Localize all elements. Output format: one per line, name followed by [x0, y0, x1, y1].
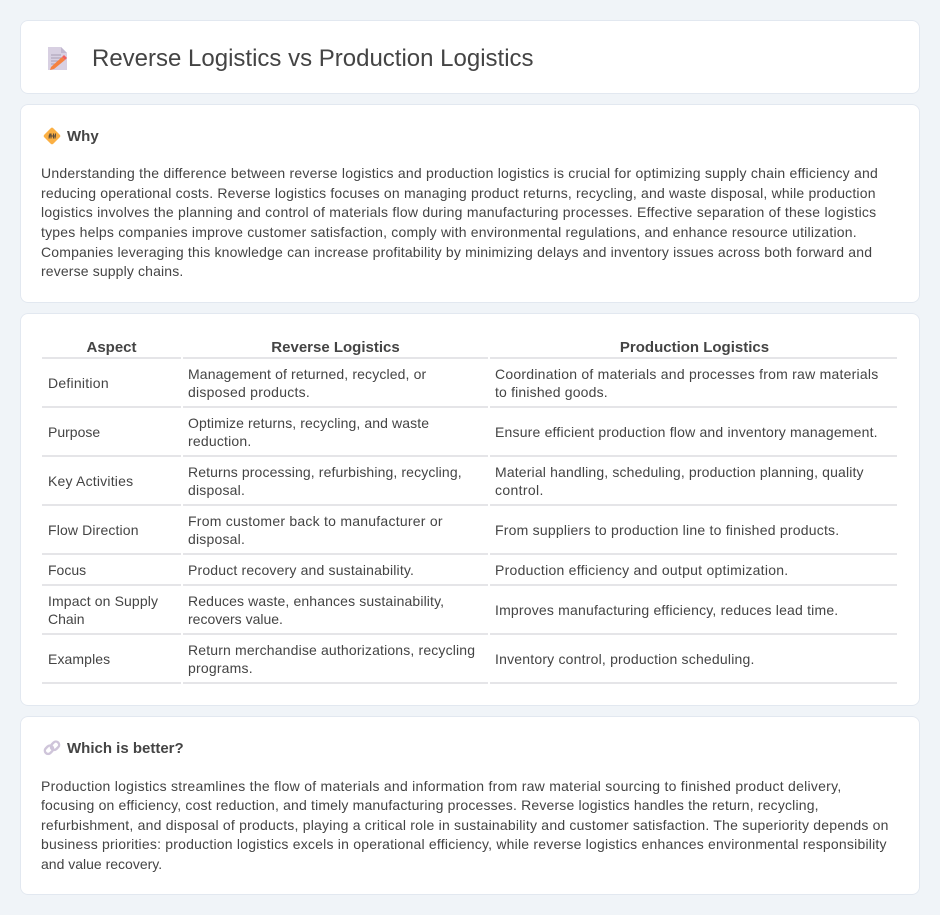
text block: why paragraph: Understanding the difference between reverse logistics and production logistics is crucial for optimizing supply chain efficiency and	[41, 165, 878, 181]
table rows: Impact on Supply	[48, 593, 158, 609]
text block: why paragraph: logistics involves the planning and control of materials flow during manufacturing processes. Effective separation of these logistics	[41, 204, 876, 220]
text block: why paragraph: types helps companies improve customer satisfaction, comply with environmental regulations, and enhance resource utilization.	[41, 224, 857, 240]
table rows: Flow Direction	[48, 522, 139, 538]
table rows: From suppliers to production line to finished products.	[495, 522, 839, 538]
table rows: Returns processing, refurbishing, recycling,	[188, 464, 462, 480]
table rows: recovers value.	[188, 611, 283, 627]
table rows: Purpose	[48, 424, 100, 440]
icon: chain link	[44, 740, 60, 756]
panel: comparison table	[20, 313, 920, 706]
panel: which is better	[20, 716, 920, 895]
text block: which is better paragraph: and value recovery.	[41, 856, 162, 872]
table rows: disposal.	[188, 531, 245, 547]
table rows: Examples	[48, 651, 110, 667]
title: Reverse Logistics vs Production Logistics	[92, 45, 534, 72]
table rows: programs.	[188, 660, 253, 676]
table rows: control.	[495, 482, 544, 498]
table rows: Product recovery and sustainability.	[188, 562, 414, 578]
panel: why	[20, 104, 920, 303]
table header	[86, 339, 769, 356]
table rows: Inventory control, production scheduling.	[495, 651, 755, 667]
text block: which is better paragraph: business priorities: production logistics excels in operational efficiency, while reverse logistics enhances environmental responsibility	[41, 836, 887, 852]
table rows: Key Activities	[48, 473, 133, 489]
table rows: Optimize returns, recycling, and waste	[188, 415, 429, 431]
table rows: reduction.	[188, 433, 251, 449]
table header: Production Logistics	[620, 339, 769, 356]
table rows: Ensure efficient production flow and inventory management.	[495, 424, 878, 440]
table rows: Reduces waste, enhances sustainability,	[188, 593, 444, 609]
table rows: Return merchandise authorizations, recycling	[188, 642, 475, 658]
table rows: Production efficiency and output optimization.	[495, 562, 788, 578]
text block: which is better paragraph	[41, 778, 889, 872]
table header: Aspect	[86, 339, 137, 356]
table rows: Chain	[48, 611, 85, 627]
panel: title header	[20, 20, 920, 94]
table rows: Improves manufacturing efficiency, reduces lead time.	[495, 602, 838, 618]
text block: which is better paragraph: focusing on efficiency, cost reduction, and timely manufacturing processes. Reverse logistics handles the return, recycling,	[41, 797, 819, 813]
table rows: disposal.	[188, 482, 245, 498]
table rows: Coordination of materials and processes from raw materials	[495, 366, 879, 382]
text block: why paragraph: reverse supply chains.	[41, 263, 183, 279]
table rows: to finished goods.	[495, 384, 608, 400]
text block: which is better paragraph: refurbishment, and disposal of products, playing a critical role in sustainability and customer satisfaction. The superiority depends on	[41, 817, 889, 833]
table rows: Focus	[48, 562, 86, 578]
text block: which is better paragraph: Production logistics streamlines the flow of materials and information from raw material sourcing to finished product delivery,	[41, 778, 842, 794]
heading: why: Why	[67, 128, 99, 145]
text block: why paragraph: reducing operational costs. Reverse logistics focuses on managing product returns, recycling, and waste disposal, while production	[41, 185, 876, 201]
text block: why paragraph	[41, 165, 878, 279]
table rows	[42, 357, 897, 684]
icon: road sign diamond	[44, 128, 60, 144]
icon: document with pencil	[48, 47, 67, 70]
table rows: Management of returned, recycled, or	[188, 366, 426, 382]
table rows: Material handling, scheduling, production planning, quality	[495, 464, 864, 480]
table rows: From customer back to manufacturer or	[188, 513, 443, 529]
table header: Reverse Logistics	[271, 339, 400, 356]
heading: which is better: Which is better?	[67, 740, 184, 757]
table rows: disposed products.	[188, 384, 310, 400]
table rows: Definition	[48, 375, 109, 391]
text block: why paragraph: Companies leveraging this knowledge can increase profitability by minimizing delays and inventory issues across both forward and	[41, 244, 872, 260]
